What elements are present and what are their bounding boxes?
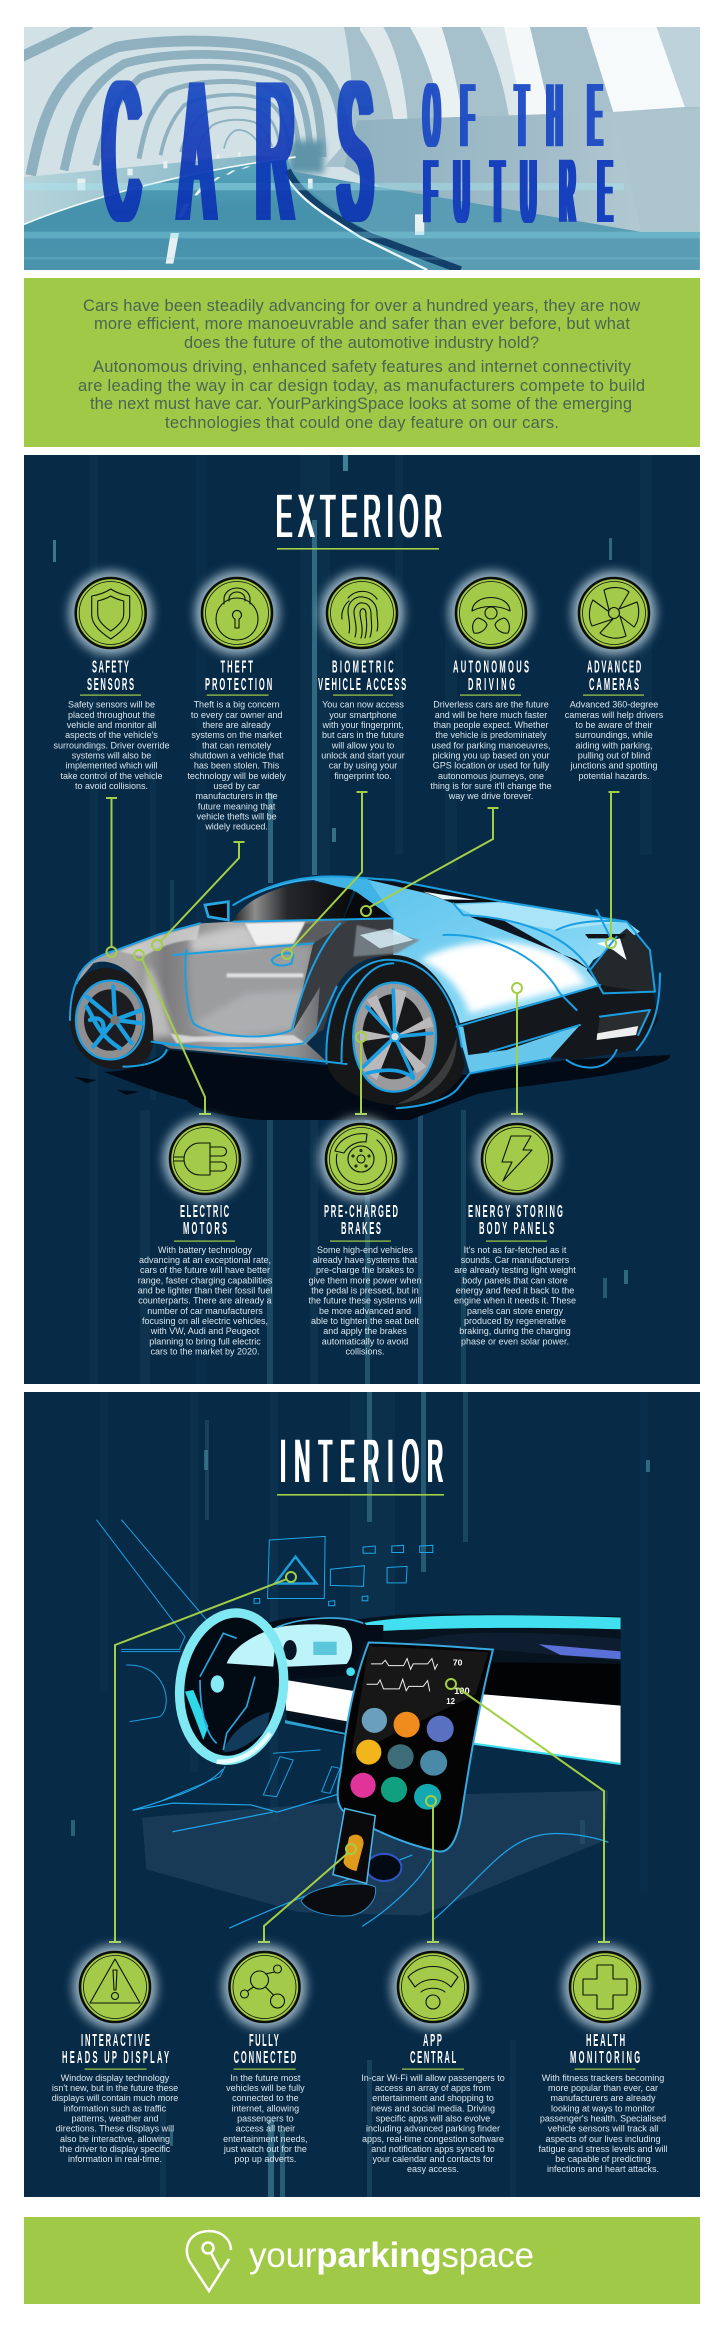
text: advanced cameras: surroundings, while: [575, 730, 653, 740]
connector: autonomous driving: [361, 808, 498, 916]
text: energy storing body panels: body panels that can store: [462, 1275, 568, 1285]
text: pre-charged brakes: give them more power when: [308, 1275, 422, 1285]
text: interactive heads up display: patterns, weather and: [71, 2114, 159, 2124]
text: energy storing body panels: [454, 1245, 576, 1346]
readouts: 12: [446, 1697, 456, 1706]
text: interactive heads up display: information such as traffic: [64, 2103, 167, 2113]
tunnel arches: [21, 24, 347, 175]
text: biometric vehicle access: will allow you to: [331, 740, 394, 750]
connector: safety sensors: [106, 798, 117, 957]
text: advanced cameras: junctions and spotting: [569, 761, 658, 771]
connector: pre-charged brakes: [355, 1032, 367, 1114]
text: energy storing body panels: produced by regenerative: [464, 1316, 566, 1326]
feature: biometric vehicle access: [318, 571, 406, 781]
text: theft protection: systems on the market: [191, 730, 282, 740]
title: theft protection: THEFT: [220, 657, 253, 676]
text: fully connected: vehicles will be fully: [226, 2083, 305, 2093]
connector: health monitoring: [446, 1679, 610, 1942]
icon: wifi: [391, 1945, 475, 2029]
panel: introduction: [24, 278, 700, 447]
icon: shield: [69, 571, 153, 655]
title: autonomous driving: [453, 657, 529, 696]
text: biometric vehicle access: your smartphone: [329, 710, 397, 720]
text: fully connected: In the future most: [230, 2073, 301, 2083]
icon: steering wheel: [449, 571, 533, 655]
text: autonomous driving: autonomous journeys, one: [438, 771, 544, 781]
title: theft protection: PROTECTION: [205, 674, 272, 694]
right wall: [324, 27, 700, 167]
icon: plug: [163, 1117, 247, 1201]
road and floor: [287, 170, 700, 270]
text: fully connected: just watch out for the: [223, 2144, 307, 2154]
title: app central: CENTRAL: [410, 2047, 456, 2067]
text: app central: [361, 2073, 505, 2174]
text: safety sensors: to avoid collisions.: [75, 781, 148, 791]
readouts: 100: [454, 1686, 470, 1696]
title: fully connected: FULLY: [249, 2030, 279, 2050]
text: safety sensors: [53, 700, 170, 791]
tablet screen: [338, 1642, 493, 1852]
text: theft protection: has been stolen. This: [194, 761, 280, 771]
title: energy storing body panels: [468, 1201, 563, 1242]
title: energy storing body panels: BODY PANELS: [479, 1218, 554, 1238]
title: advanced cameras: [583, 657, 644, 696]
text: theft protection: there are already: [203, 720, 271, 730]
rear face and bumper: [590, 928, 655, 993]
text: safety sensors: placed throughout the: [68, 710, 155, 720]
text: safety sensors: vehicle and monitor all: [67, 720, 156, 730]
car illustration: [70, 876, 670, 1120]
text: pre-charged brakes: the future these systems will: [308, 1296, 422, 1306]
text: app central: access an array of apps from: [375, 2083, 491, 2093]
feature: energy storing body panels: [454, 1117, 576, 1346]
feature: health monitoring: [538, 1945, 668, 2174]
text: electric motors: cars of the future will have better: [140, 1265, 270, 1275]
text: app central: specific apps will also evolve: [376, 2114, 490, 2124]
title: energy storing body panels: ENERGY STORING: [468, 1201, 563, 1221]
text: interactive heads up display: the driver to display specific: [60, 2144, 171, 2154]
text: health monitoring: vehicle sensors will track all: [548, 2124, 658, 2134]
title: safety sensors: SAFETY: [92, 657, 129, 676]
title: health monitoring: MONITORING: [570, 2047, 640, 2067]
connector: biometric access: [282, 792, 368, 959]
icon: location pin logo: [187, 2231, 231, 2291]
text: energy storing body panels: engine when it needs it. These: [454, 1296, 576, 1306]
title: fully connected: CONNECTED: [234, 2047, 296, 2067]
text: biometric vehicle access: car by using your: [329, 761, 397, 771]
title: interactive heads up display: [62, 2030, 169, 2070]
text: energy storing body panels: panels can store energy: [467, 1306, 564, 1316]
text: biometric vehicle access: You can now access: [322, 700, 404, 710]
text: electric motors: number of car manufacturers: [147, 1306, 263, 1316]
car blue outline: [70, 876, 660, 1108]
text: app central: easy access.: [407, 2164, 459, 2174]
front wheel: [70, 968, 153, 1069]
text: biometric vehicle access: unlock and start your: [321, 750, 405, 760]
title: theft protection: [205, 657, 272, 696]
text: health monitoring: fatigue and stress levels and will: [538, 2144, 668, 2154]
roof and windows: [237, 876, 393, 917]
text: energy storing body panels: are already testing light weight: [454, 1265, 576, 1275]
feature: interactive heads up display: [52, 1945, 178, 2164]
title: biometric vehicle access: BIOMETRIC: [332, 657, 394, 676]
title: app central: APP: [423, 2030, 442, 2050]
title: advanced cameras: CAMERAS: [589, 674, 639, 694]
text: advanced cameras: potential hazards.: [578, 771, 650, 781]
text: fully connected: connected to the: [232, 2093, 299, 2103]
text: advanced cameras: Advanced 360-degree: [570, 700, 658, 710]
connector: theft protection: [152, 842, 244, 950]
text: autonomous driving: than people expect. Whether: [433, 720, 549, 730]
text: theft protection: manufacturers in the: [196, 791, 278, 801]
floor shadow: [142, 1791, 608, 1916]
text: pre-charged brakes: Some high-end vehicles: [317, 1245, 414, 1255]
heart rate traces: [367, 1659, 438, 1691]
text: theft protection: shutdown a vehicle that: [190, 750, 284, 760]
feature: autonomous driving: [430, 571, 552, 801]
connector: app central: [426, 1796, 439, 1942]
intro paragraph one: does the future of the automotive industry hold?: [184, 334, 539, 352]
text: app central: your calendar and contacts for: [372, 2154, 494, 2164]
intro paragraph two: the next must have car. YourParkingSpace looks at some of the emerging: [90, 395, 632, 413]
text: health monitoring: looking at ways to monitor: [551, 2103, 655, 2113]
intro paragraph one: Cars have been steadily advancing for over a hundred years, they are now: [83, 297, 640, 315]
intro paragraph two: are leading the way in car design today, as manufacturers compete to build: [78, 377, 645, 395]
text: health monitoring: With fitness trackers becoming: [542, 2073, 664, 2083]
dashboard illustration: [142, 1614, 621, 1916]
text: autonomous driving: picking you up based on your: [432, 750, 550, 760]
road markings: [77, 152, 424, 264]
text: theft protection: to every car owner and: [191, 710, 282, 720]
text: app central: and notification apps synced to: [371, 2144, 495, 2154]
text: fully connected: passengers to: [237, 2114, 294, 2124]
text: electric motors: and be lighter than their fossil fuel: [138, 1286, 272, 1296]
text: fully connected: access all their: [236, 2124, 295, 2134]
text: autonomous driving: Driverless cars are the future: [433, 700, 549, 710]
text: safety sensors: take control of the vehicle: [60, 771, 163, 781]
text: app central: apps, real-time congestion software: [362, 2134, 504, 2144]
icon: fingerprint: [320, 571, 404, 655]
text: electric motors: range, faster charging capabilities: [138, 1275, 273, 1285]
text: energy storing body panels: energy and feed it back to the: [456, 1286, 574, 1296]
text: autonomous driving: [430, 700, 552, 801]
text: energy storing body panels: It's not as far-fetched as it: [464, 1245, 567, 1255]
title: safety sensors: SENSORS: [87, 674, 134, 694]
intro paragraph one: more efficient, more manoeuvrable and safer than ever before, but what: [94, 315, 630, 333]
hero title: FUTURE: FUTURE: [424, 141, 612, 241]
title: pre-charged brakes: BRAKES: [341, 1218, 381, 1238]
text: health monitoring: infections and heart attacks.: [547, 2164, 659, 2174]
title: health monitoring: [570, 2030, 640, 2070]
readouts: 70: [453, 1658, 463, 1668]
text: fully connected: entertainment needs,: [223, 2134, 308, 2144]
text: energy storing body panels: braking, during the charging: [459, 1326, 571, 1336]
text: health monitoring: aspects of our lives including: [545, 2134, 661, 2144]
text: autonomous driving: GPS location or used for fully: [433, 761, 550, 771]
connector: electric motors: [134, 950, 211, 1114]
text: autonomous driving: way we drive forever.: [448, 791, 533, 801]
text: app central: In-car Wi-Fi will allow passengers to: [361, 2073, 505, 2083]
text: advanced cameras: to be aware of their: [575, 720, 653, 730]
text: app central: entertainment and shopping to: [372, 2093, 494, 2103]
app icons: [350, 1708, 454, 1810]
text: fully connected: internet, allowing: [232, 2103, 299, 2113]
text: interactive heads up display: isn't new, but in the future these: [52, 2083, 178, 2093]
text: theft protection: vehicle thefts will be: [197, 812, 277, 822]
text: pre-charged brakes: be more advanced and: [319, 1306, 411, 1316]
text: theft protection: Theft is a big concern: [194, 700, 280, 710]
title: pre-charged brakes: PRE-CHARGED: [324, 1201, 398, 1221]
title: autonomous driving: DRIVING: [468, 674, 515, 694]
text: theft protection: future meaning that: [198, 801, 276, 811]
feature: safety sensors: [53, 571, 170, 791]
text: biometric vehicle access: [321, 700, 405, 781]
footer banner: [24, 2217, 700, 2304]
text: theft protection: technology will be widely: [187, 771, 286, 781]
cluster hood: [257, 1616, 383, 1680]
text: biometric vehicle access: with your fingerprint,: [321, 720, 404, 730]
text: theft protection: that can remotely: [202, 740, 272, 750]
text: health monitoring: manufacturers are already: [550, 2093, 656, 2103]
text: safety sensors: systems will also be: [72, 750, 151, 760]
title: health monitoring: HEALTH: [586, 2030, 625, 2050]
intro paragraph two: [78, 358, 645, 432]
title: autonomous driving: AUTONOMOUS: [453, 657, 529, 676]
icon: warning triangle: [73, 1945, 157, 2029]
icon: network nodes: [222, 1945, 306, 2029]
feature: app central: [361, 1945, 505, 2174]
text: pre-charged brakes: already have systems that: [313, 1255, 418, 1265]
text: safety sensors: implemented which will: [65, 761, 158, 771]
text: interactive heads up display: [52, 2073, 178, 2164]
intro paragraph one: [83, 297, 640, 352]
text: fully connected: [223, 2073, 308, 2164]
text: theft protection: used by car: [213, 781, 260, 791]
connector: advanced cameras: [606, 792, 620, 948]
panel: exterior: [24, 455, 700, 1384]
text: theft protection: [187, 700, 286, 832]
text: interactive heads up display: also be interactive, allowing: [60, 2134, 170, 2144]
text: autonomous driving: and will be here much faster: [435, 710, 547, 720]
text: autonomous driving: used for parking manoeuvres,: [431, 740, 551, 750]
text: interactive heads up display: information in real-time.: [68, 2154, 162, 2164]
icon: lightning bolt: [475, 1117, 559, 1201]
text: pre-charged brakes: and apply the brakes: [323, 1326, 407, 1336]
title: biometric vehicle access: VEHICLE ACCESS: [318, 674, 406, 694]
text: advanced cameras: [565, 700, 664, 781]
title: interactive heads up display: HEADS UP DISPLAY: [62, 2047, 169, 2067]
intro paragraph two: technologies that could one day feature on our cars.: [165, 414, 559, 432]
text: pre-charged brakes: pre-charge the brakes to: [316, 1265, 414, 1275]
feature: pre-charged brakes: [308, 1117, 422, 1356]
text: pre-charged brakes: able to tighten the seat belt: [311, 1316, 420, 1326]
title: app central: [402, 2030, 464, 2070]
text: electric motors: [138, 1245, 273, 1356]
rear quarter panels: [356, 879, 640, 1023]
text: electric motors: counterparts. There are already a: [138, 1296, 272, 1306]
feature: theft protection: [187, 571, 286, 832]
title: electric motors: [174, 1201, 235, 1242]
text: pre-charged brakes: the pedal is pressed, but in: [311, 1286, 419, 1296]
text: health monitoring: be capable of predicting: [555, 2154, 651, 2164]
text: biometric vehicle access: but cars in the future: [322, 730, 404, 740]
text: electric motors: focusing on all electric vehicles,: [142, 1316, 268, 1326]
text: advanced cameras: cameras will help drivers: [565, 710, 664, 720]
icon: medical cross: [563, 1945, 647, 2029]
text: energy storing body panels: sounds. Car manufacturers: [461, 1255, 570, 1265]
text: pre-charged brakes: collisions.: [345, 1346, 385, 1356]
intro paragraph two: Autonomous driving, enhanced safety features and internet connectivity: [93, 358, 632, 376]
HUD projection icons: [254, 1536, 433, 1606]
text: advanced cameras: pulling out of blind: [578, 750, 650, 760]
text: energy storing body panels: phase or even solar power.: [461, 1336, 569, 1346]
dashboard glow band: [282, 1614, 621, 1765]
text: interactive heads up display: directions. These displays will: [56, 2124, 174, 2134]
text: interactive heads up display: Window display technology: [61, 2073, 170, 2083]
text: safety sensors: aspects of the vehicle's: [65, 730, 158, 740]
connector: energy storing panels: [511, 983, 523, 1114]
text: advanced cameras: aiding with parking,: [575, 740, 653, 750]
feature: fully connected: [222, 1945, 308, 2164]
panel: interior: [24, 1392, 700, 2197]
title: fully connected: [234, 2030, 296, 2070]
text: interactive heads up display: displays will contain much more: [52, 2093, 178, 2103]
icon: padlock: [195, 571, 279, 655]
title: electric motors: MOTORS: [183, 1218, 227, 1238]
feature: advanced cameras: [565, 571, 664, 781]
rear wheel: [326, 955, 464, 1107]
hero title: CARS: CARS: [104, 39, 372, 263]
text: electric motors: planning to bring full electric: [149, 1336, 261, 1346]
heading: exterior: EXTERIOR: [276, 482, 442, 550]
text: health monitoring: [538, 2073, 668, 2174]
text: theft protection: widely reduced.: [204, 822, 268, 832]
phone on dock: [301, 1809, 401, 1916]
title: interactive heads up display: INTERACTIVE: [81, 2030, 150, 2050]
feature: electric motors: [138, 1117, 273, 1356]
title: advanced cameras: ADVANCED: [587, 657, 641, 676]
icon: brake disc: [319, 1117, 403, 1201]
logo wordmark: yourparkingspace: [249, 2236, 534, 2275]
text: safety sensors: surroundings. Driver override: [53, 740, 170, 750]
connector: fully connected: [258, 1844, 356, 1942]
title: pre-charged brakes: [324, 1201, 398, 1242]
text: autonomous driving: the vehicle is predominately: [435, 730, 547, 740]
car shadow: [73, 1050, 670, 1120]
text: autonomous driving: thing is for sure it'll change the: [430, 781, 552, 791]
heading: interior: INTERIOR: [280, 1427, 443, 1495]
text: safety sensors: Safety sensors will be: [68, 700, 155, 710]
steering wheel and cluster: [97, 1520, 383, 1800]
text: app central: news and social media. Driving: [371, 2103, 495, 2113]
text: electric motors: With battery technology: [158, 1245, 253, 1255]
text: pre-charged brakes: [308, 1245, 422, 1356]
mirror: [205, 902, 228, 920]
interior trim lines: [97, 1520, 340, 1800]
car body: [77, 876, 658, 1073]
text: pre-charged brakes: automatically to avoid: [322, 1336, 408, 1346]
lower trim lines: [132, 1769, 608, 1928]
title: safety sensors: [80, 657, 141, 696]
text: electric motors: advancing at an exceptional rate,: [139, 1255, 271, 1265]
connector: heads up display: [109, 1572, 296, 1942]
readouts: [446, 1658, 470, 1706]
icon: aperture: [572, 571, 656, 655]
title: biometric vehicle access: [318, 657, 406, 696]
text: health monitoring: more popular than ever, car: [548, 2083, 658, 2093]
hero title: OF THE: OF THE: [424, 65, 602, 165]
text: health monitoring: passenger's health. Specialised: [540, 2114, 666, 2124]
text: app central: including advanced parking finder: [366, 2124, 500, 2134]
text: biometric vehicle access: fingerprint too.: [334, 771, 392, 781]
text: electric motors: cars to the market by 2020.: [150, 1346, 260, 1356]
text: electric motors: with VW, Audi and Peugeot: [150, 1326, 260, 1336]
text: fully connected: pop up adverts.: [234, 2154, 296, 2164]
title: electric motors: ELECTRIC: [180, 1201, 229, 1221]
steering wheel: [171, 1607, 292, 1766]
hero panel: [21, 24, 700, 270]
